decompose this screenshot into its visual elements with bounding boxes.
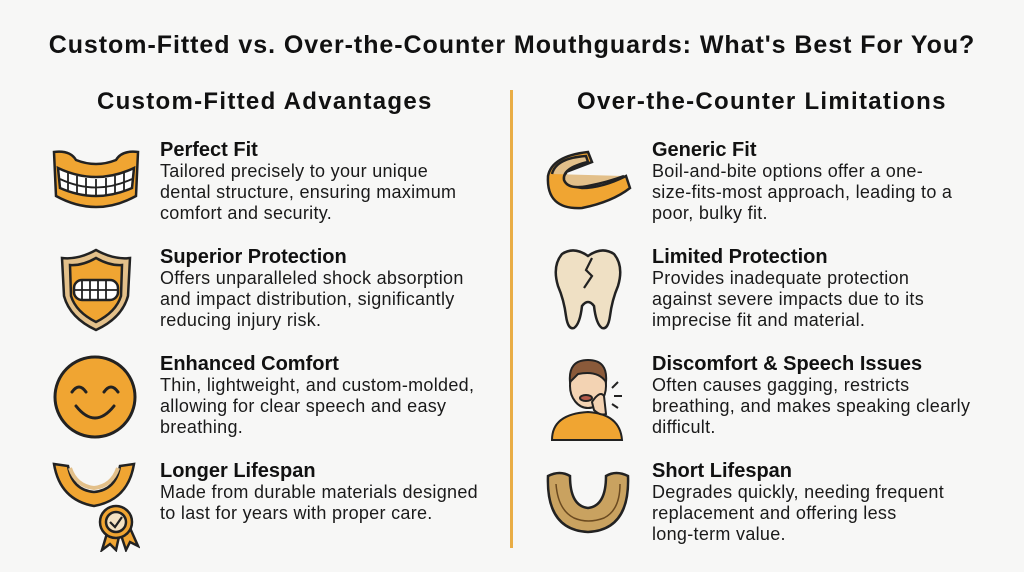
- item: enhanced comfort: [160, 353, 474, 437]
- heading: right column: Over-the-Counter Limitations: [577, 88, 947, 115]
- item: superior protection: reducing injury risk.: [160, 310, 321, 330]
- item: discomfort & speech issues: Discomfort & Speech Issues: [652, 353, 922, 375]
- item: longer lifespan: Longer Lifespan: [160, 460, 316, 482]
- item: generic fit: Boil-and-bite options offer a one-: [652, 161, 923, 181]
- item: longer lifespan: Made from durable materials designed: [160, 482, 478, 502]
- item: short lifespan: Degrades quickly, needing frequent: [652, 482, 944, 502]
- item: limited protection: against severe impacts due to its: [652, 289, 924, 309]
- icon: smiley: [54, 356, 136, 438]
- item: perfect fit: Perfect Fit: [160, 139, 258, 161]
- item: generic fit: [652, 139, 952, 223]
- item: perfect fit: [160, 139, 456, 223]
- item: superior protection: and impact distribution, significantly: [160, 289, 455, 309]
- item: discomfort & speech issues: breathing, and makes speaking clearly: [652, 396, 970, 416]
- icon: mouthguard with teeth: [52, 150, 140, 208]
- item: short lifespan: [652, 460, 944, 544]
- item: limited protection: imprecise fit and material.: [652, 310, 865, 330]
- item: superior protection: Offers unparalleled shock absorption: [160, 268, 464, 288]
- item: discomfort & speech issues: difficult.: [652, 417, 716, 437]
- icon: cracked tooth: [554, 249, 622, 330]
- item: perfect fit: comfort and security.: [160, 203, 332, 223]
- item: generic fit: Generic Fit: [652, 139, 756, 161]
- icon: worn mouthguard: [546, 472, 630, 534]
- item: discomfort & speech issues: [652, 353, 970, 437]
- item: enhanced comfort: breathing.: [160, 417, 243, 437]
- item: limited protection: Provides inadequate protection: [652, 268, 909, 288]
- item: perfect fit: dental structure, ensuring maximum: [160, 182, 456, 202]
- item: superior protection: Superior Protection: [160, 246, 347, 268]
- item: limited protection: Limited Protection: [652, 246, 828, 268]
- item: longer lifespan: [160, 460, 478, 523]
- item: short lifespan: Short Lifespan: [652, 460, 792, 482]
- item: perfect fit: Tailored precisely to your unique: [160, 161, 428, 181]
- item: short lifespan: replacement and offering less: [652, 503, 897, 523]
- title: Custom-Fitted vs. Over-the-Counter Mouthguards: What's Best For You?: [49, 31, 975, 59]
- item: enhanced comfort: allowing for clear speech and easy: [160, 396, 446, 416]
- item: generic fit: size-fits-most approach, leading to a: [652, 182, 952, 202]
- item: limited protection: [652, 246, 924, 330]
- item: enhanced comfort: Thin, lightweight, and custom-molded,: [160, 375, 474, 395]
- item: longer lifespan: to last for years with proper care.: [160, 503, 433, 523]
- icon: generic mouthguard: [546, 150, 632, 210]
- icon: person in discomfort: [551, 359, 624, 441]
- item: superior protection: [160, 246, 464, 330]
- icon: mouthguard with award ribbon: [52, 462, 140, 552]
- icon: shield with teeth: [60, 248, 132, 332]
- item: generic fit: poor, bulky fit.: [652, 203, 768, 223]
- heading: left column: Custom-Fitted Advantages: [97, 88, 433, 115]
- item: discomfort & speech issues: Often causes gagging, restricts: [652, 375, 909, 395]
- divider: [510, 90, 513, 548]
- item: enhanced comfort: Enhanced Comfort: [160, 353, 339, 375]
- item: short lifespan: long-term value.: [652, 524, 786, 544]
